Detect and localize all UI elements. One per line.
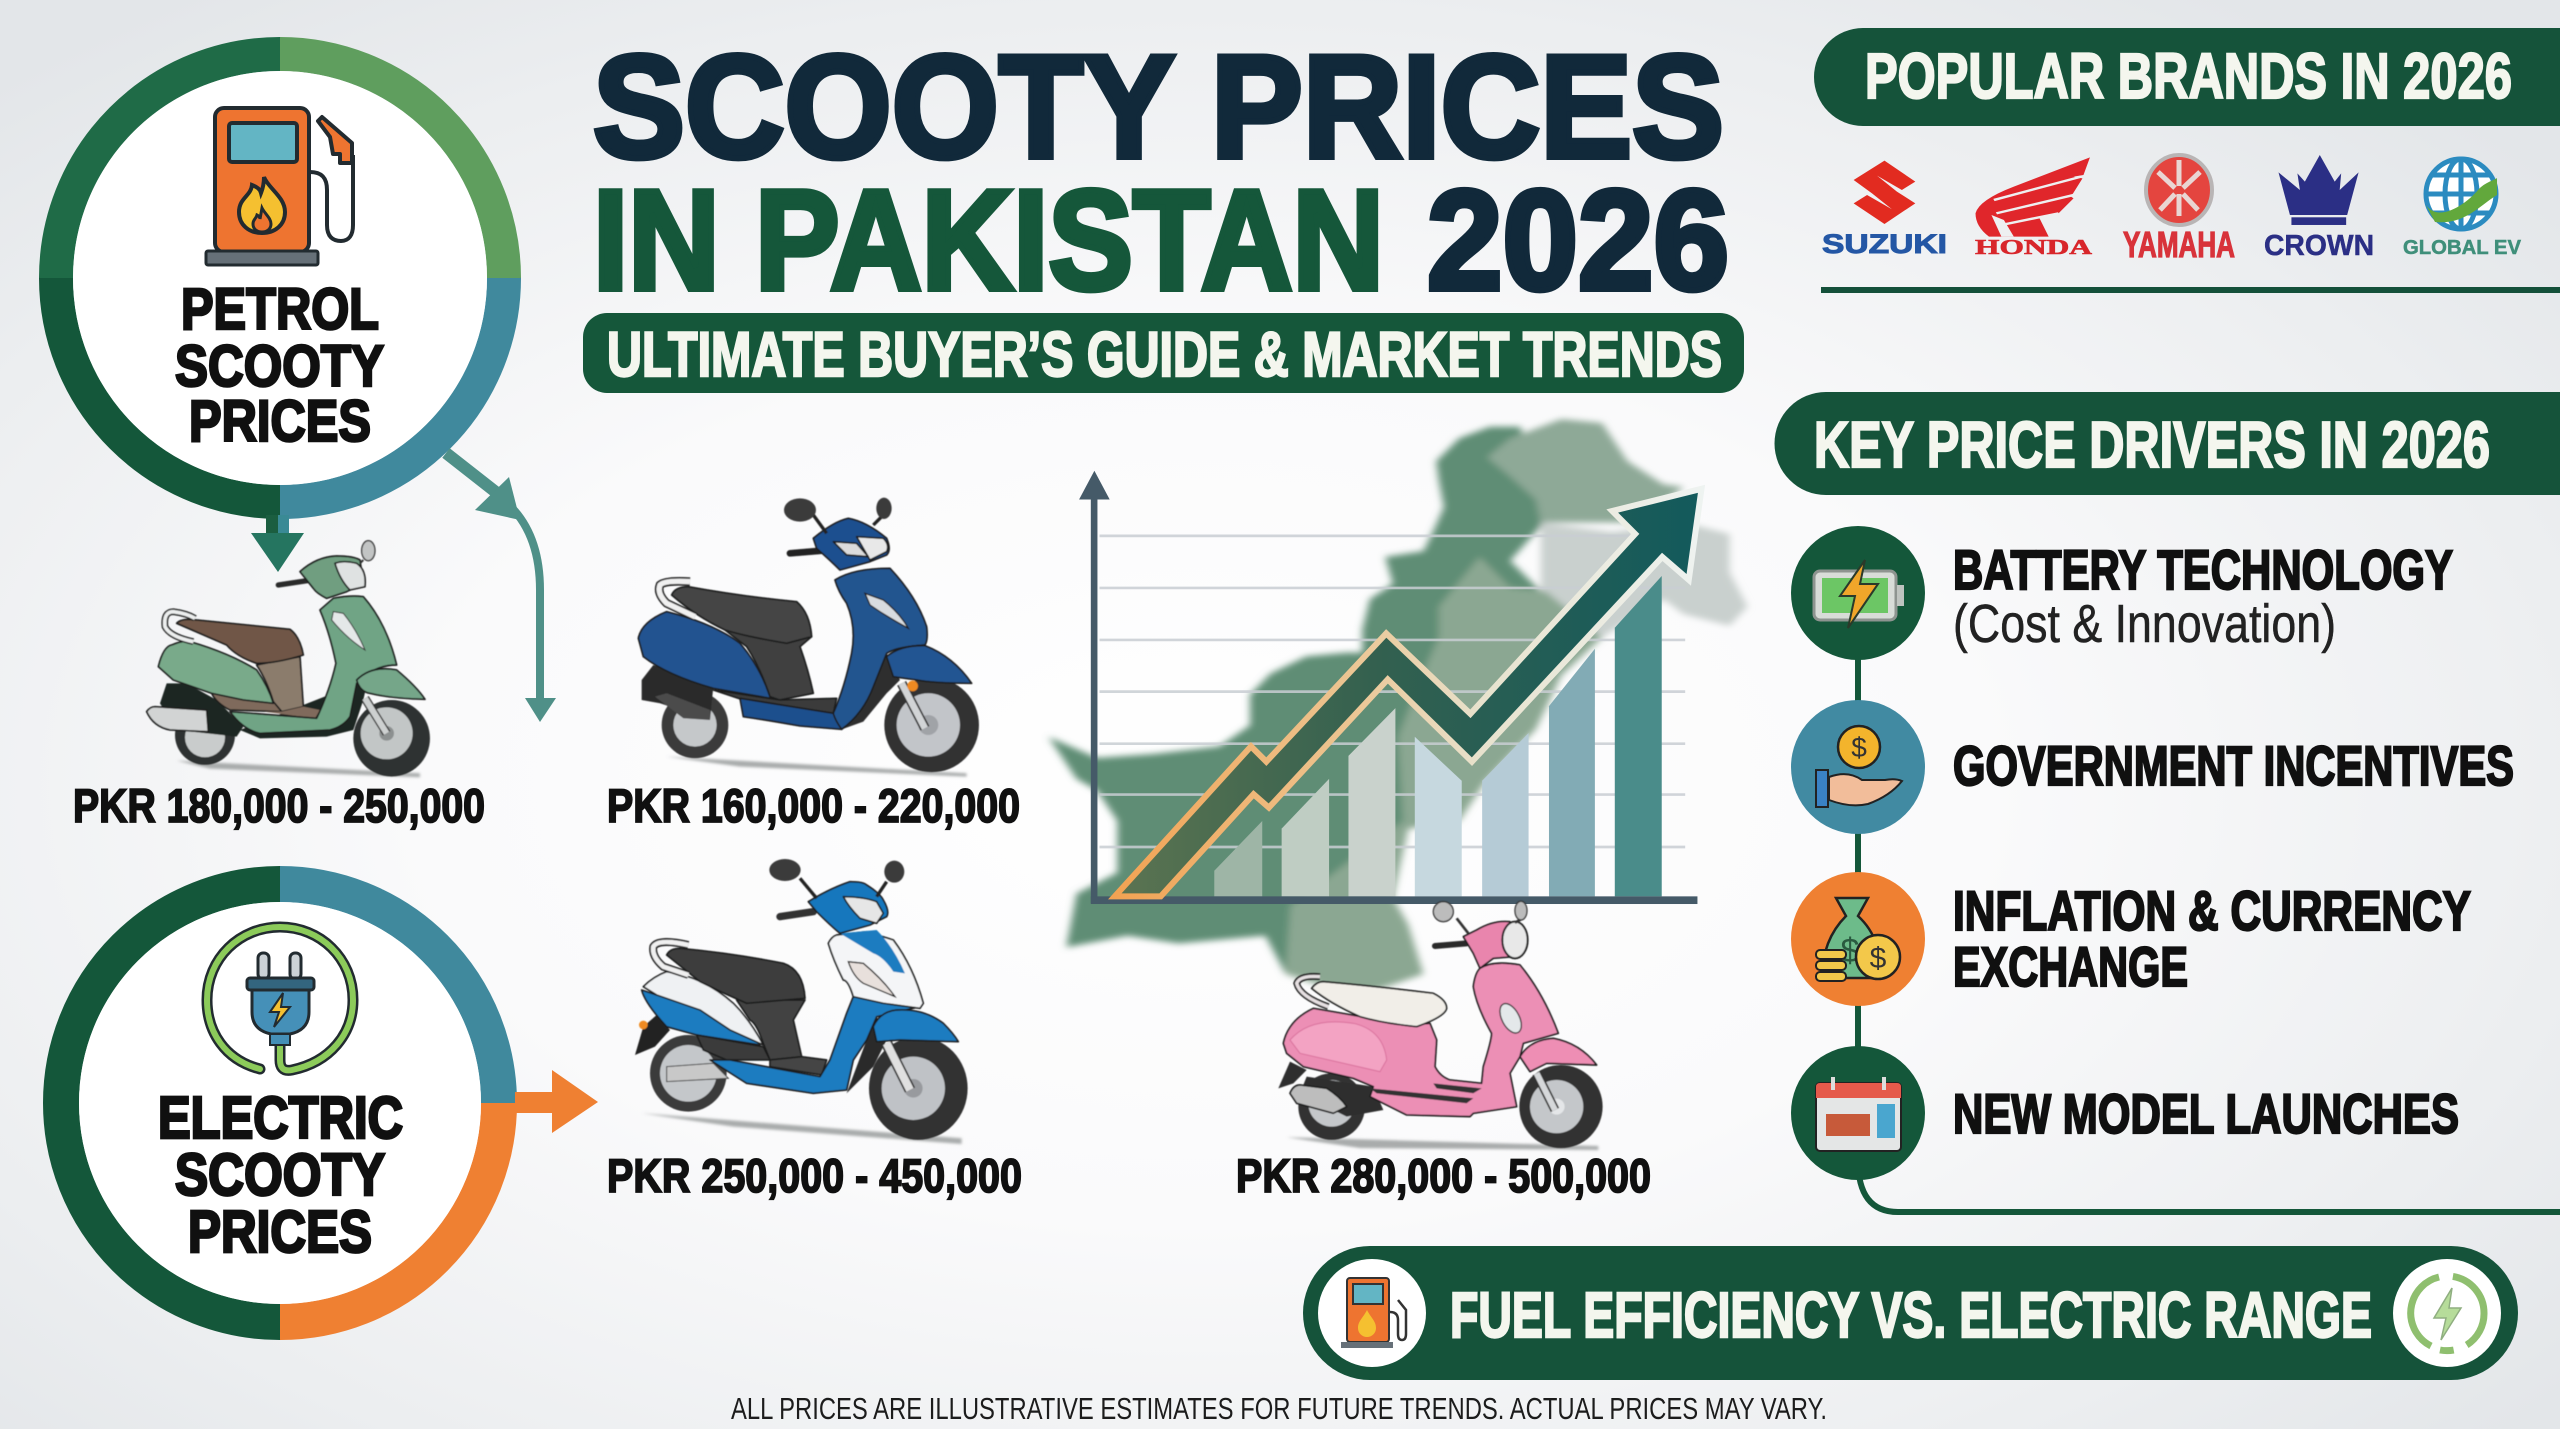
icon: charging cycle <box>2411 1276 2484 1351</box>
bars <box>1214 576 1662 896</box>
scooter: blue petrol <box>638 498 979 777</box>
logo: Global EV <box>2403 157 2522 259</box>
panel: key price drivers <box>1774 392 2560 1212</box>
driver: government incentives <box>1791 700 2514 834</box>
icon: calendar <box>1816 1077 1901 1151</box>
icon: coin and hand: $ <box>1851 732 1867 763</box>
icon: money bag and coins <box>1816 898 1900 981</box>
arrow: petrol down <box>251 515 304 572</box>
heading: electric: SCOOTY <box>175 1142 385 1208</box>
callout: fuel efficiency vs electric range <box>1303 1246 2518 1380</box>
panel: petrol scooty prices circle <box>56 54 504 502</box>
logo: Suzuki <box>1822 161 1947 259</box>
heading: petrol <box>175 277 384 454</box>
driver: inflation and currency exchange <box>1791 872 2471 1006</box>
heading: petrol: PETROL <box>181 277 379 342</box>
heading: electric: PRICES <box>188 1199 372 1265</box>
heading: petrol: SCOOTY <box>175 334 384 399</box>
subtitle banner <box>583 313 1744 393</box>
scooter: blue and white electric <box>635 859 968 1144</box>
text: battery technology <box>1953 538 2453 654</box>
heading: key price drivers <box>1774 392 2560 495</box>
arrow: petrol branch <box>446 453 556 722</box>
icon: electric plug <box>207 927 353 1070</box>
driver: battery technology <box>1791 526 2453 660</box>
price: pink electric: PKR 280,000 - 500,000 <box>1236 1149 1651 1202</box>
icon: small fuel pump <box>1341 1278 1406 1348</box>
text: battery technology: (Cost & Innovation) <box>1953 594 2336 654</box>
icon: money bag and coins: $ <box>1870 942 1887 975</box>
text: inflation and currency <box>1953 879 2471 998</box>
logo: Suzuki: SUZUKI <box>1822 229 1947 259</box>
map: Pakistan silhouette <box>1048 419 1747 997</box>
heading: popular brands <box>1814 28 2560 126</box>
footer disclaimer: ALL PRICES ARE ILLUSTRATIVE ESTIMATES FOR FUTURE TRENDS. ACTUAL PRICES MAY VARY. <box>731 1391 1827 1426</box>
icon: coin and hand <box>1816 726 1902 807</box>
title: 2026 <box>1427 161 1729 320</box>
driver: new model launches <box>1791 1046 2459 1180</box>
logo: Global EV: GLOBAL EV <box>2403 237 2522 259</box>
price: green petrol: PKR 180,000 - 250,000 <box>73 779 485 832</box>
scooter: green petrol <box>147 541 430 777</box>
icon: battery <box>1814 560 1904 628</box>
logo: Yamaha: YAMAHA <box>2123 224 2235 265</box>
logo: Crown: CROWN <box>2264 230 2374 262</box>
arrow: electric right <box>515 1070 598 1133</box>
price: blue petrol: PKR 160,000 - 220,000 <box>607 779 1020 832</box>
title <box>593 25 1729 320</box>
axes <box>1079 471 1697 904</box>
heading: petrol: PRICES <box>189 389 371 454</box>
text: inflation and currency: EXCHANGE <box>1953 935 2188 998</box>
logo: Crown <box>2264 155 2374 262</box>
icon: money bag and coins: $ <box>1841 932 1860 970</box>
subtitle banner: ULTIMATE BUYER’S GUIDE & MARKET TRENDS <box>607 320 1722 390</box>
scooter: pink electric <box>1278 901 1603 1150</box>
logo: Honda: HONDA <box>1975 235 2093 259</box>
icon: fuel pump <box>206 108 353 265</box>
arrow: trend line <box>1115 489 1702 896</box>
chart: rising price trend <box>1079 471 1702 904</box>
price: blue and white electric: PKR 250,000 - 450,000 <box>607 1149 1022 1202</box>
title: IN PAKISTAN <box>593 161 1384 320</box>
title: SCOOTY PRICES <box>593 25 1724 188</box>
heading: electric: ELECTRIC <box>158 1085 403 1151</box>
panel: electric scooty prices circle <box>61 884 499 1322</box>
heading: electric <box>158 1085 403 1265</box>
logo: Honda <box>1975 157 2093 259</box>
panel: popular brands <box>1814 28 2560 293</box>
logo: Yamaha <box>2123 155 2235 265</box>
